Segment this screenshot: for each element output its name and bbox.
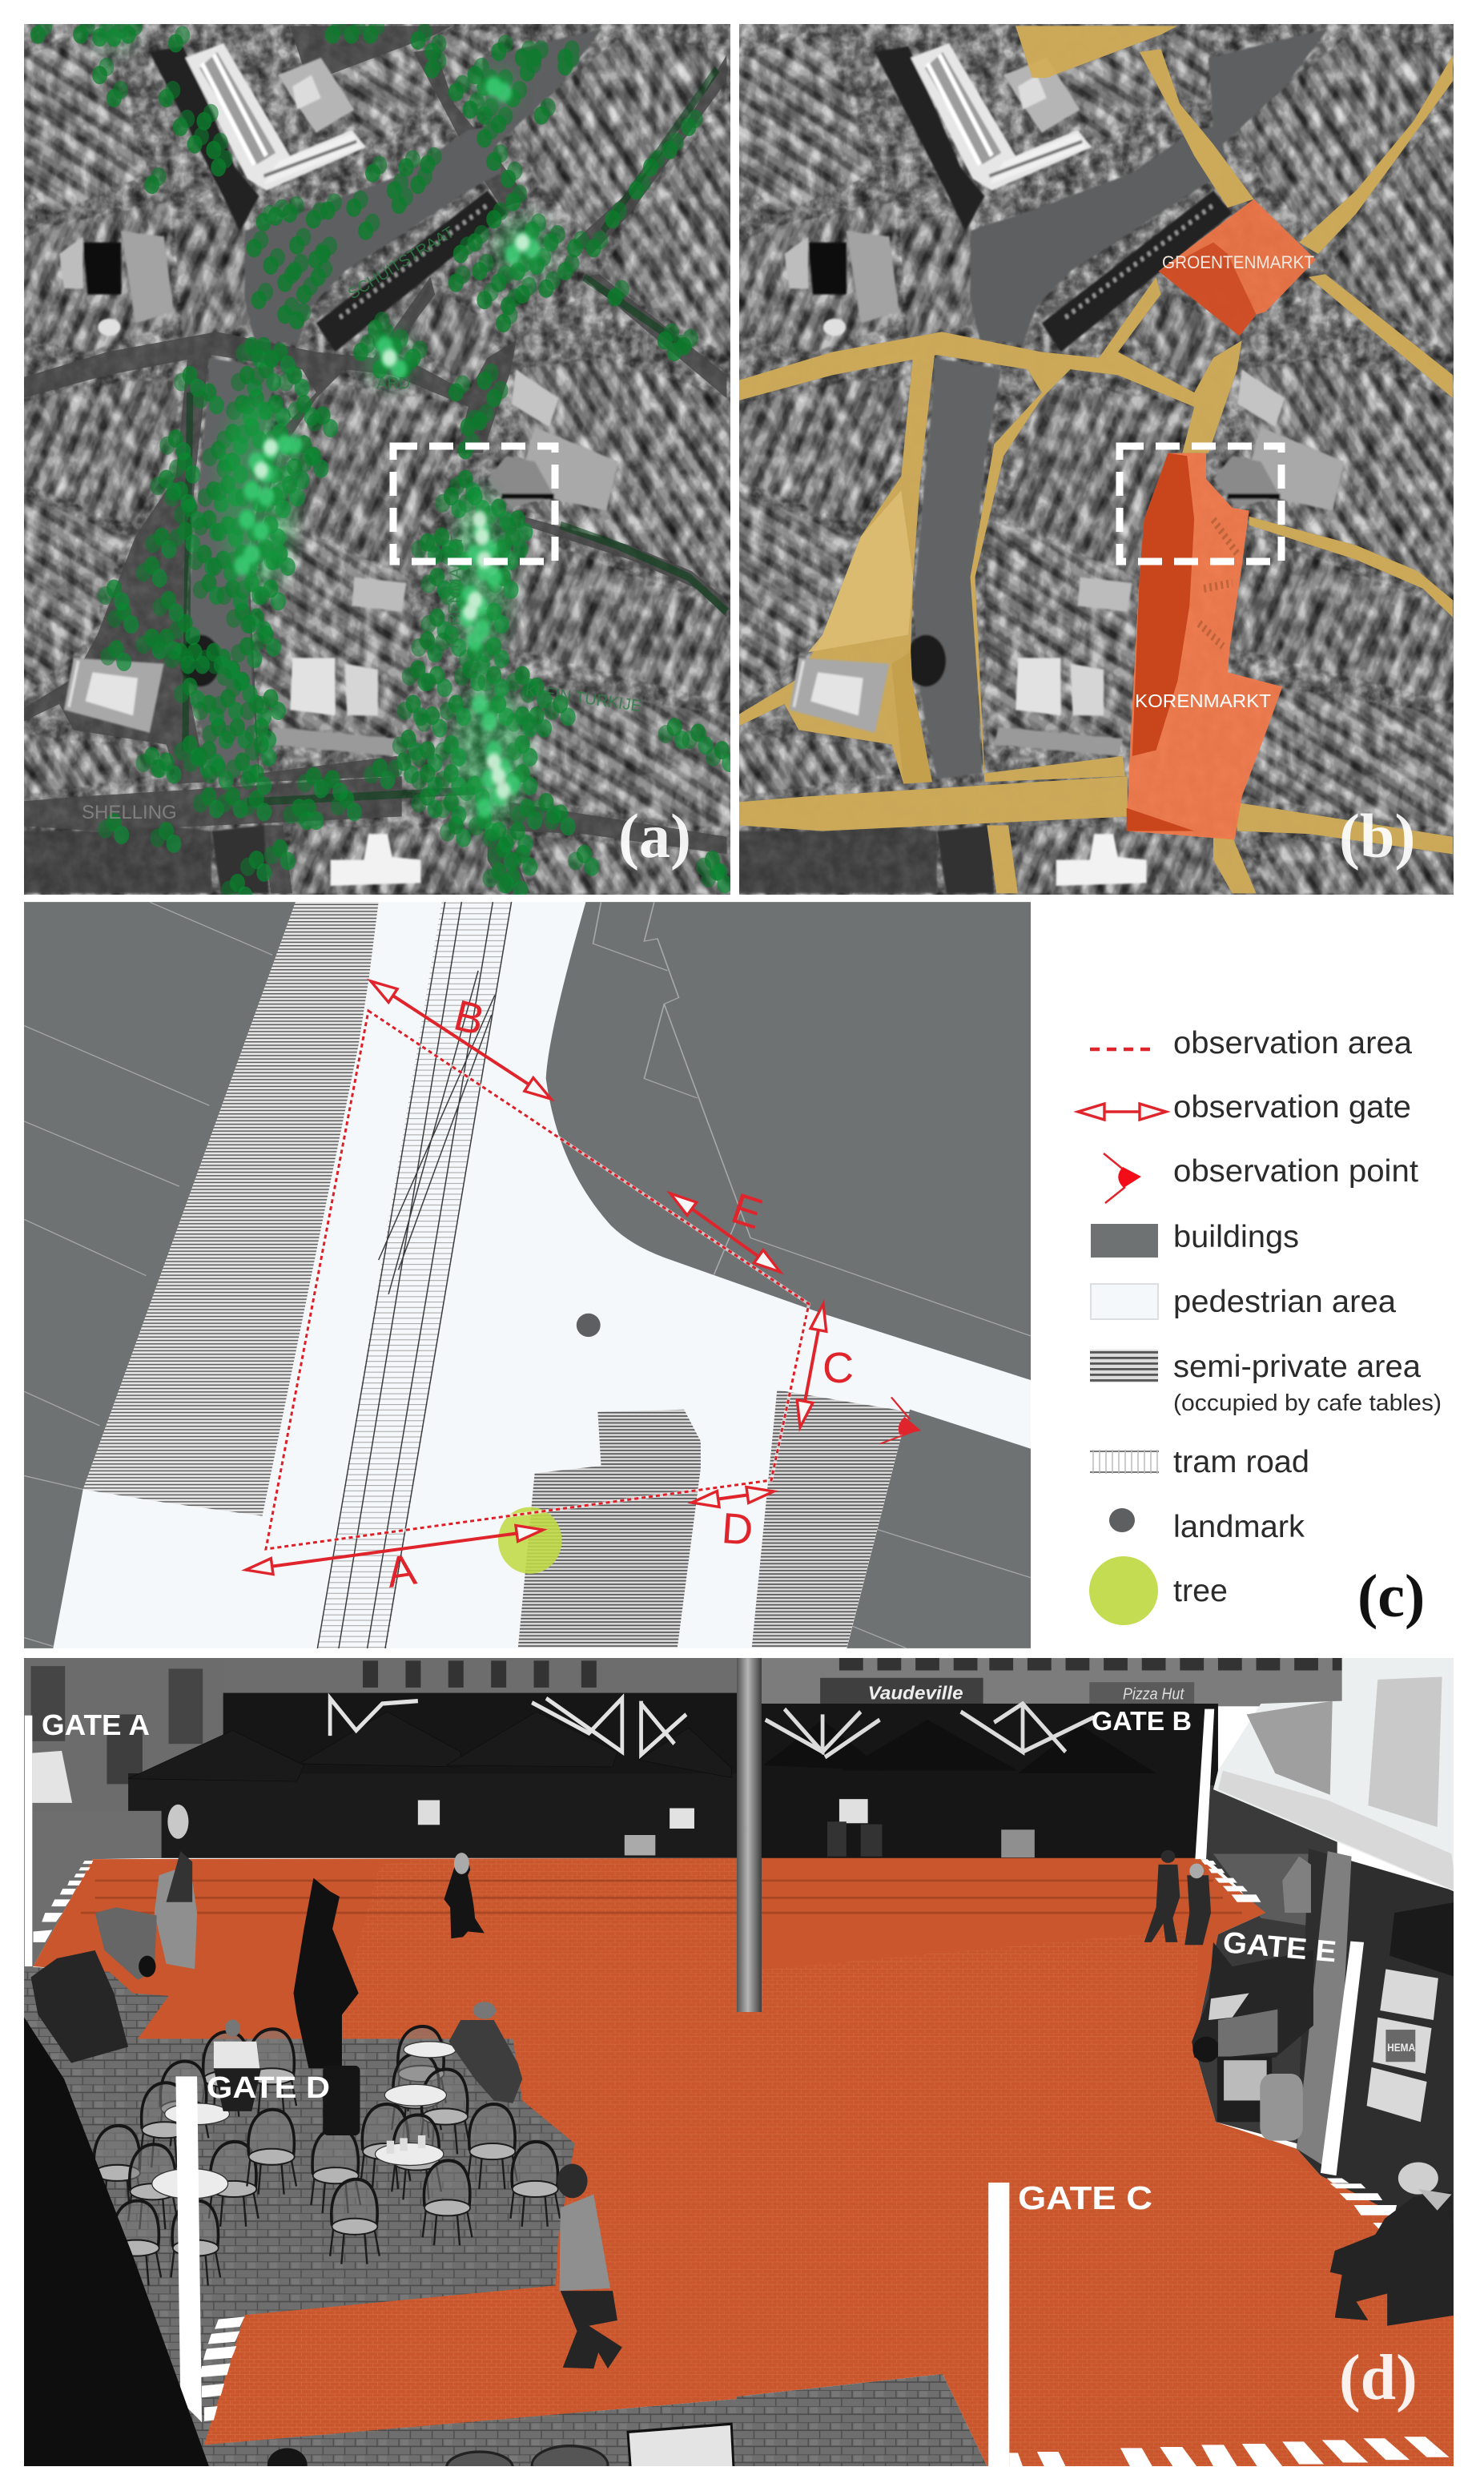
gate labels on photo: GATE A (42, 1708, 150, 1741)
street names on heat-map: KLEIN TURKIJE (524, 682, 642, 715)
street names on heat-map: SCHUITSTRAAT (345, 223, 457, 303)
legend: observation gate: observation gate (1173, 1090, 1411, 1125)
black umbrella base (323, 2066, 360, 2135)
observation area dashed outline (266, 1011, 809, 1549)
legend: tree: tree (1173, 1574, 1228, 1608)
concrete building at right (1213, 1658, 1456, 1893)
legend: semi-private area: semi-private area (1173, 1350, 1421, 1384)
legend: semi-private area (1090, 1350, 1442, 1416)
label (b): (b) (1339, 801, 1415, 871)
posters (1367, 1969, 1438, 2122)
gate labels on plan: D (720, 1504, 754, 1555)
label KORENMARKT: KORENMARKT (1135, 690, 1271, 711)
Korenmarkt surface texture (1199, 519, 1237, 646)
legend: observation area: observation area (1173, 1026, 1412, 1060)
table cups (390, 2135, 422, 2154)
gate D dashes (199, 2316, 244, 2421)
legend: tram road (1090, 1445, 1309, 1479)
Korenmarkt shadow side (1132, 453, 1194, 756)
gate labels on plan: C (822, 1344, 854, 1392)
panel d: photo of the square with gates (19, 1658, 1456, 2485)
left pavement (19, 1811, 162, 1994)
bottom head and chairs (267, 2446, 608, 2485)
black umbrellas (128, 1712, 731, 1781)
Groentenmarkt orange square (1159, 199, 1316, 336)
aerial photo base a (0, 18, 754, 900)
dashed study-area box b (1120, 446, 1281, 561)
walking couple (1144, 1850, 1211, 1945)
legend: buildings (1091, 1220, 1299, 1258)
aerial photo base b (718, 18, 1480, 900)
dark terrace right (737, 1704, 1218, 1859)
panel a: green heat-map of pedestrian traces on aerial photo (0, 18, 754, 900)
arcade column (1297, 1851, 1352, 2173)
sign at bottom (628, 2424, 734, 2470)
group with stroller (95, 1805, 197, 1980)
tram road (317, 902, 512, 1648)
gate E white pole and dashes (1321, 1942, 1397, 2231)
tree (498, 1507, 562, 1574)
pedestrian with headscarf (444, 1853, 485, 1938)
label (d): (d) (1339, 2343, 1418, 2413)
gate labels on photo: GATE B (1092, 1706, 1192, 1736)
seated man in white (214, 2019, 261, 2111)
dashed study-area box a (393, 446, 555, 561)
photo right half (737, 1658, 1456, 2466)
dark arcade base (1297, 1849, 1456, 2251)
legend: pedestrian area (1091, 1284, 1396, 1319)
person near gate B (1282, 1857, 1311, 1913)
orange observed ground (34, 1858, 745, 2445)
gate labels on plan: E (726, 1184, 768, 1239)
landmark (577, 1314, 601, 1337)
label (c): (c) (1357, 1563, 1425, 1630)
facade and stone building (19, 1658, 750, 1857)
sign at gate A (32, 1751, 72, 1803)
gate C white pole and dashes (988, 2183, 1450, 2466)
gate labels on photo: GATE C (1018, 2179, 1152, 2216)
gate labels on photo: GATE D (207, 2071, 330, 2105)
plan base drawing (24, 902, 1031, 1648)
green observation dots (38, 26, 730, 895)
HEMA poster (1385, 2030, 1415, 2062)
street names on heat-map: ARD (376, 375, 410, 392)
cafe tables (152, 2042, 456, 2199)
seated man bottom right (1330, 2162, 1456, 2326)
legend: semi-private area: (occupied by cafe tables) (1173, 1390, 1442, 1416)
label (a): (a) (618, 801, 691, 871)
streets and squares overlay (737, 26, 1453, 893)
gate labels on photo: GATE E (1221, 1926, 1337, 1968)
legend: landmark (1109, 1508, 1305, 1544)
Pizza Hut sign: Pizza Hut (1123, 1686, 1184, 1704)
central metal pole (737, 1658, 762, 2012)
right facade (737, 1658, 1456, 1706)
panel c: observation plan (24, 902, 1031, 1648)
legend: pedestrian area: pedestrian area (1173, 1285, 1396, 1319)
legend: tree (1089, 1556, 1228, 1625)
label GROENTENMARKT: GROENTENMARKT (1162, 252, 1314, 272)
legend: buildings: buildings (1173, 1220, 1299, 1254)
paved area behind gates B and E (1194, 1784, 1337, 2154)
gate B white pole and dashes (1195, 1709, 1261, 1902)
legend: landmark: landmark (1173, 1510, 1305, 1544)
pedestrian area (24, 902, 1031, 1648)
seated people left (31, 1950, 128, 2063)
semi-private hatched areas (83, 902, 910, 1648)
terrace furniture (827, 1799, 1035, 1857)
cafe chairs (93, 2026, 560, 2285)
legend: observation point: observation point (1173, 1154, 1418, 1189)
gate labels on plan: B (449, 991, 489, 1044)
building in west wedge b (789, 658, 889, 733)
Vaudeville sign (820, 1678, 983, 1704)
street names on heat-map: SHELLING (82, 802, 177, 823)
walking woman in coat (557, 2163, 622, 2368)
plants (1389, 1902, 1456, 1977)
panel b: aerial with streets and squares highlighted (718, 18, 1480, 900)
legend for panel c (1078, 1026, 1442, 1630)
scooter and bins (1192, 1942, 1313, 2141)
HEMA poster: HEMA (1387, 2042, 1415, 2054)
buildings (24, 902, 1031, 1648)
gate labels on plan: A (384, 1545, 419, 1597)
gate A white pole and dashes (25, 1716, 93, 1966)
gate labels on photo (42, 1706, 1337, 2216)
street names on heat-map (82, 223, 642, 823)
closed black umbrella (293, 1878, 359, 2068)
white frame sculptures right (766, 1704, 1094, 1757)
cobbles lower-left of right half (737, 2374, 987, 2466)
gate labels on plan (384, 991, 854, 1597)
building outlines (24, 902, 1031, 1648)
Korenmarkt orange square (1127, 453, 1282, 839)
lighter wedge of street (808, 490, 913, 652)
Pizza Hut sign (1089, 1682, 1194, 1704)
dark cafe terrace (128, 1773, 750, 1858)
menu signs (418, 1800, 440, 1825)
Groentenmarkt shadow (1159, 243, 1257, 336)
legend: observation point (1104, 1153, 1418, 1203)
legend: tram road: tram road (1173, 1445, 1309, 1479)
black curtain foreground (19, 2010, 209, 2470)
white frame sculptures (330, 1698, 686, 1755)
orange ground right (737, 1858, 1456, 2466)
gate arrows on plan (246, 981, 823, 1570)
gate D white pole (175, 2076, 202, 2422)
photo left half (19, 1658, 750, 2485)
Vaudeville sign: Vaudeville (868, 1684, 963, 1704)
street names on heat-map: KORENMARKT (444, 535, 466, 649)
seated man with cap (448, 2002, 522, 2103)
road shadow (891, 652, 932, 783)
gold pedestrian streets (737, 26, 1453, 893)
cafe cobbled ground (19, 1966, 593, 2466)
heat-map hot spots (95, 26, 551, 831)
building in west wedge a (64, 658, 164, 733)
observation point on plan (880, 1397, 921, 1444)
